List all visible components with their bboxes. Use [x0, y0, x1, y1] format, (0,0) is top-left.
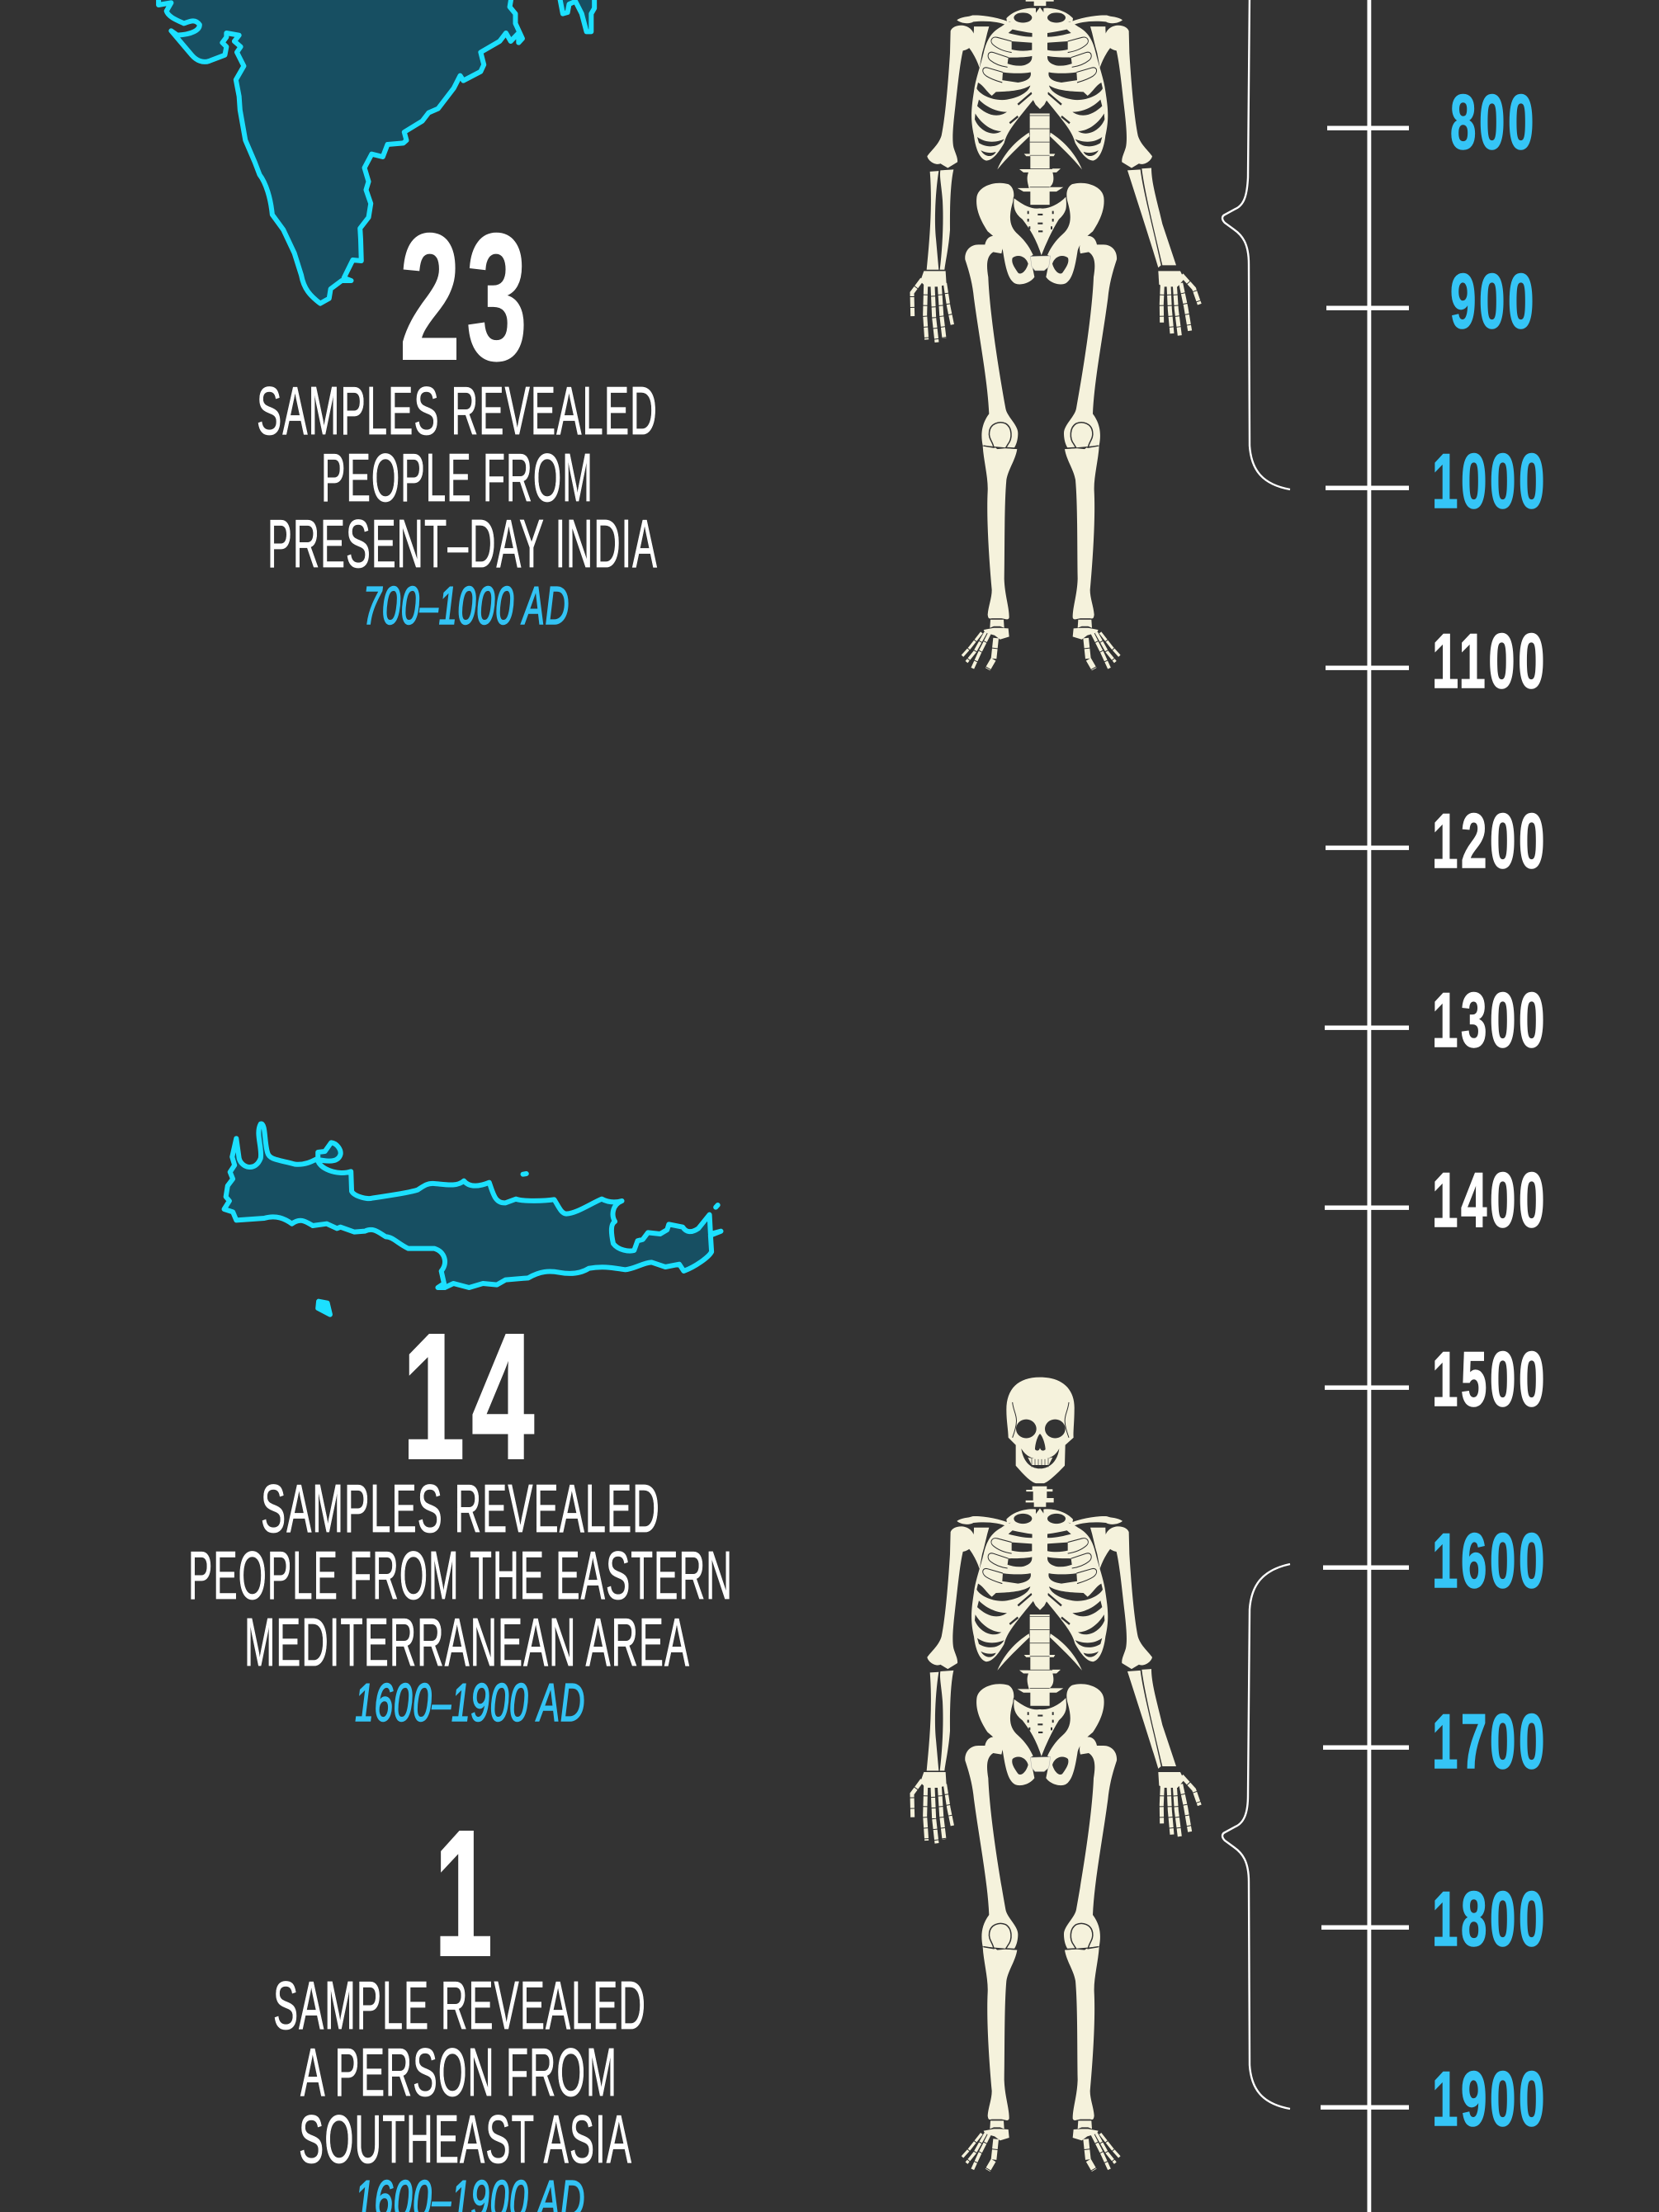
text block: India samples: PRESENT–DAY INDIA	[267, 505, 658, 582]
text block: India samples: PEOPLE FROM	[321, 439, 593, 516]
skeleton: lower	[912, 1378, 1199, 2170]
timeline year labels: 1300	[1432, 976, 1548, 1063]
timeline year labels: 1600	[1432, 1517, 1548, 1604]
date range: 700-1000 AD: 700–1000 AD	[363, 575, 570, 636]
timeline ticks	[1321, 125, 1409, 2110]
brace: lower range	[1222, 1564, 1290, 2109]
big number 14: 14	[402, 1297, 541, 1497]
text block: Southeast Asia sample: SOUTHEAST ASIA	[299, 2101, 632, 2177]
timeline year labels: 1400	[1432, 1156, 1548, 1243]
text block: Southeast Asia sample: A PERSON FROM	[300, 2034, 617, 2110]
skeleton: upper	[912, 0, 1199, 669]
brace: upper range	[1222, 0, 1290, 489]
timeline year labels: 1500	[1432, 1335, 1548, 1422]
date range: 1600-1900 AD: 1600–1900 AD	[355, 1672, 585, 1732]
text block: India samples: SAMPLES REVEALED	[257, 372, 658, 449]
timeline axis	[1367, 0, 1371, 2212]
timeline year labels	[1432, 78, 1548, 2142]
timeline year labels: 1100	[1432, 617, 1548, 704]
map: India	[158, 0, 594, 304]
text block: Southeast Asia sample	[273, 1967, 646, 2177]
timeline year labels: 1900	[1432, 2055, 1548, 2142]
text block: eastern Mediterranean samples: SAMPLES REVEALED	[261, 1470, 660, 1547]
timeline year labels: 1200	[1432, 797, 1548, 884]
timeline year labels: 800	[1450, 78, 1537, 165]
text block: India samples	[257, 372, 658, 582]
text block: eastern Mediterranean samples: PEOPLE FROM THE EASTERN	[188, 1537, 733, 1614]
timeline year labels: 1800	[1432, 1875, 1548, 1962]
timeline year labels: 900	[1450, 258, 1537, 344]
timeline year labels: 1700	[1432, 1698, 1548, 1784]
text block: eastern Mediterranean samples: MEDITERRANEAN AREA	[244, 1604, 690, 1680]
text block: Southeast Asia sample: SAMPLE REVEALED	[273, 1967, 646, 2044]
map: eastern Mediterranean (Crete)	[225, 1124, 721, 1315]
text block: eastern Mediterranean samples	[188, 1470, 733, 1680]
big number 1: 1	[434, 1794, 499, 1994]
big number 23: 23	[399, 197, 533, 398]
timeline year labels: 1000	[1432, 437, 1548, 524]
